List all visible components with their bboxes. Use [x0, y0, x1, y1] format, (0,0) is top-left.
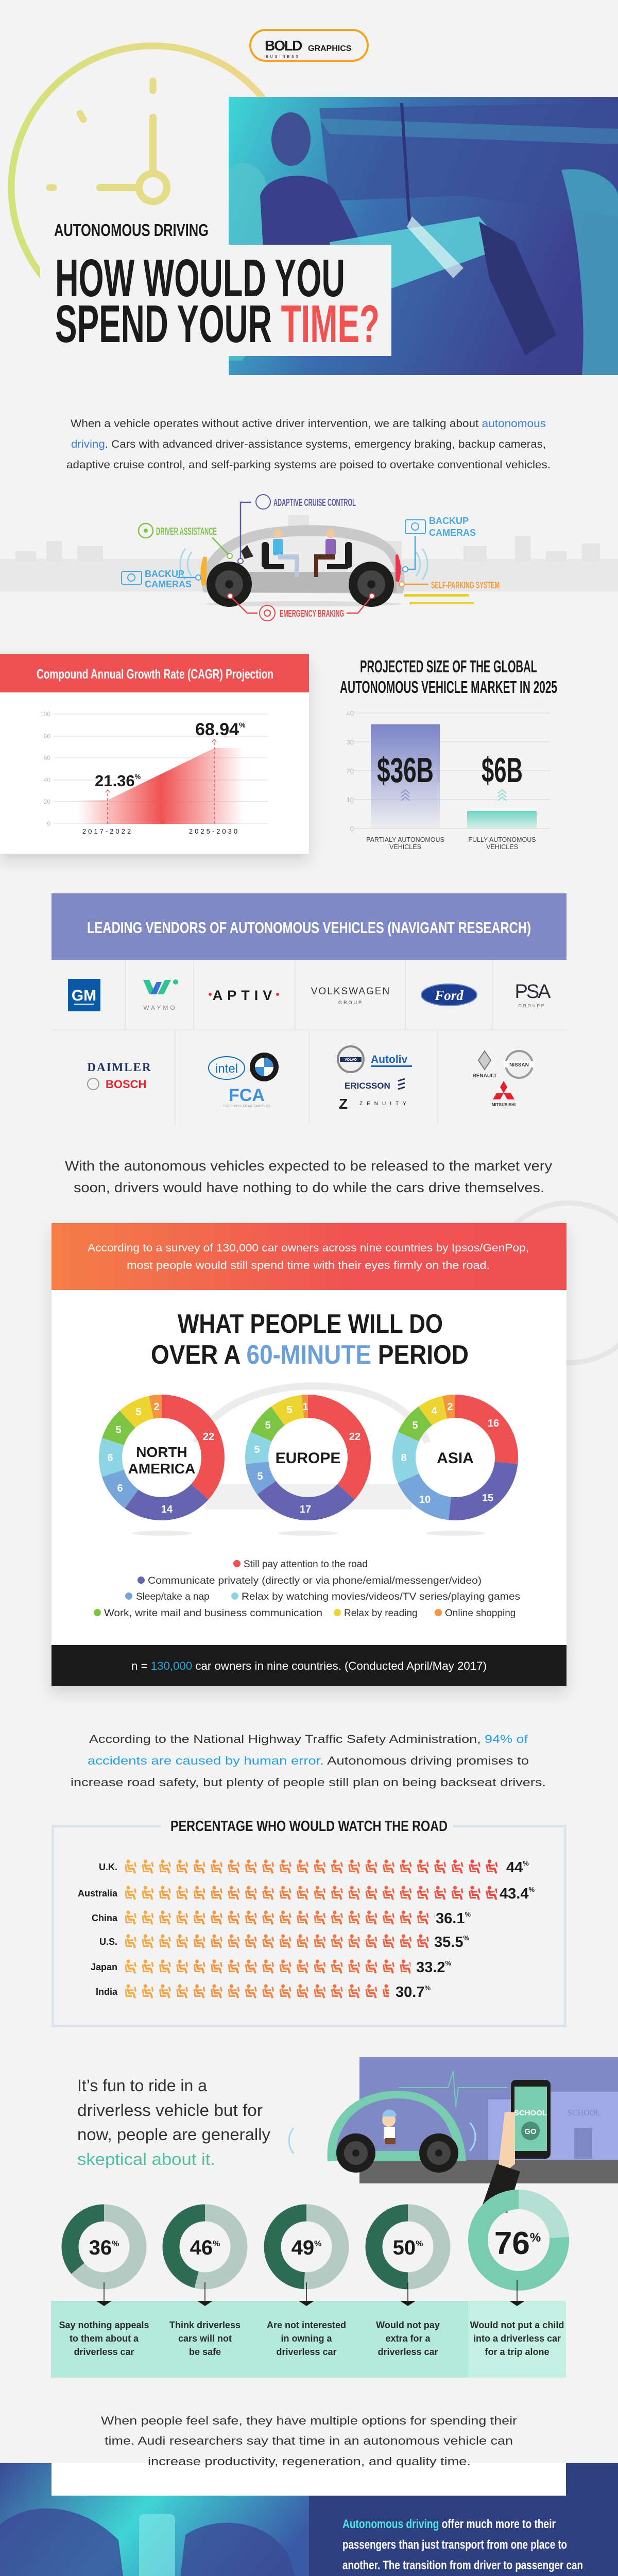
panel: skeptical captions: extra for a [385, 2333, 431, 2344]
CAGR header text: Compound Annual Growth Rate (CAGR) Projection [37, 666, 273, 682]
text: fun to ride but skeptical: It’s fun to ride in a [77, 2076, 207, 2095]
row: Australia: Australia [78, 1888, 118, 1899]
panel: CAGR projection chart: 2025-2030 [189, 827, 239, 835]
donut: North America [107, 1401, 214, 1515]
donut: Asia: 10 [419, 1494, 431, 1505]
panel: skeptical captions [51, 2301, 566, 2378]
donut: 50% would not pay extra: % [416, 2240, 423, 2248]
row: China: % [465, 1910, 471, 1918]
logo: Aptiv: APTIV [213, 988, 277, 1003]
subtitle: autonomous driving: AUTONOMOUS DRIVING [54, 221, 209, 240]
logo: Bold Business Graphics: GRAPHICS [308, 44, 352, 53]
donut: Europe: 17 [300, 1504, 311, 1515]
panel: CAGR projection chart: 68.94 [195, 720, 239, 739]
donut: Europe: 5 [286, 1404, 293, 1416]
logo: Intel / BMW / FCA [209, 1053, 279, 1108]
row: UK: % [523, 1859, 529, 1867]
logo: PSA Groupe: GROUPE [519, 1004, 545, 1008]
legend: Relax by watching movies/videos/TV series/playing games [242, 1591, 520, 1602]
chart: projected market size 2025: 20 [347, 767, 354, 775]
bar: fully autonomous [467, 811, 537, 828]
logo: Daimler / Bosch [87, 1061, 152, 1091]
icon: clock [11, 46, 295, 329]
donut: 76% would not put child: 76 [494, 2226, 530, 2261]
row: India: India [96, 1987, 118, 1997]
label: self-parking system: SELF-PARKING SYSTEM [431, 580, 500, 590]
logo: Volkswagen Group: GROUP [338, 1000, 363, 1005]
donut: North America: 5 [115, 1425, 122, 1436]
chart: projected market size 2025: $6B [482, 751, 523, 790]
donut: North America: 2 [153, 1401, 160, 1413]
legend: Online shopping [445, 1608, 516, 1619]
illustration: kid in driverless car, phone: SCHOOL [514, 2109, 547, 2117]
donut: 46% think not safe: % [213, 2240, 220, 2248]
chart: projected market size 2025: FULLY AUTONOMOUS [468, 836, 536, 843]
row: Australia: % [528, 1886, 535, 1893]
panel: CAGR projection chart: 21.36 [95, 772, 135, 790]
row: US [100, 1934, 469, 1948]
donut: Asia: ASIA [437, 1450, 474, 1467]
bar: partially autonomous [371, 724, 440, 828]
row: UK: U.K. [99, 1862, 117, 1872]
chart: projected market size 2025: VEHICLES [486, 843, 518, 851]
donut: Europe: 5 [265, 1420, 271, 1431]
panel: skeptical captions: driverless car [276, 2347, 337, 2357]
donut: Asia: 8 [401, 1452, 407, 1464]
panel: skeptical captions: in owning a [281, 2333, 332, 2344]
donut: 49% not interested: 49 [291, 2236, 314, 2259]
panel: leading vendors header [52, 893, 566, 960]
text: vehicles released soon [65, 1158, 553, 1195]
panel: survey what people will do [52, 1223, 566, 1686]
row: India: 30.7 [396, 1984, 424, 2001]
logo: Bold Business Graphics: BUSINESS [266, 55, 300, 59]
main title: HOW WOULD YOU [55, 248, 345, 308]
survey footnote bar [52, 1645, 566, 1686]
text: when people feel safe: When people feel safe, they have multiple options for spending their [101, 2414, 517, 2427]
label: emergency braking [228, 594, 374, 621]
legend: Sleep/take a nap [136, 1591, 210, 1602]
logo: Volvo / Autoliv / Ericsson / Zenuity: Z [339, 1096, 348, 1112]
label: adaptive cruise control [238, 495, 356, 564]
legend: Communicate privately (directly or via phone/emial/messenger/video) [148, 1575, 482, 1586]
donut: Asia: 16 [488, 1418, 499, 1429]
row: Australia [78, 1886, 535, 1900]
text: fun to ride but skeptical: driverless vehicle but for [77, 2101, 263, 2120]
logo: Ford [421, 984, 477, 1006]
text: fun to ride but skeptical: skeptical about it. [77, 2150, 215, 2168]
panel: CAGR projection chart: 100 [40, 710, 50, 718]
logo: Renault / Nissan / Mitsubishi: RENAULT [472, 1073, 497, 1079]
label: backup cameras right: CAMERAS [429, 528, 476, 538]
text: when people feel safe: increase productivity, regeneration, and quality time. [148, 2455, 471, 2468]
donut: 49% not interested: % [314, 2240, 321, 2248]
panel: CAGR projection chart: % [239, 721, 246, 729]
panel: CAGR projection chart: 20 [44, 798, 50, 805]
text: NHTSA human error [71, 1733, 546, 1789]
donut: 50% would not pay extra [374, 2213, 442, 2303]
panel: percentage who would watch the road [53, 1816, 565, 2026]
panel: skeptical captions: be safe [189, 2347, 221, 2357]
row: China: China [92, 1913, 118, 1923]
panel: percentage who would watch the road: PERCENTAGE WHO WOULD WATCH THE ROAD [170, 1818, 448, 1835]
text: NHTSA human error: increase road safety, but plenty of people still plan on being backseat drivers. [71, 1776, 546, 1789]
chart: projected market size 2025: 40 [347, 709, 354, 717]
donut: Europe: 5 [257, 1471, 263, 1482]
donut: Asia: 15 [482, 1493, 493, 1504]
panel: skeptical captions: Think driverless [169, 2320, 241, 2330]
donut: North America: NORTH [136, 1444, 187, 1460]
panel: CAGR projection chart: 0 [47, 820, 50, 827]
donut: Europe [254, 1401, 360, 1515]
panel: CAGR projection chart: 40 [44, 776, 50, 784]
chart: projected market size 2025: VEHICLES [389, 843, 421, 851]
panel: skeptical captions: Would not put a child [470, 2320, 564, 2330]
donut: Asia: 4 [431, 1405, 437, 1417]
panel: skeptical captions: for a trip alone [485, 2347, 550, 2357]
illustration: kid in driverless car, phone: GO [524, 2127, 537, 2136]
logo: GM [68, 979, 100, 1011]
donut: Europe: 5 [254, 1444, 260, 1455]
donut: 36% say nothing appeals [70, 2213, 138, 2303]
row: China: 36.1 [436, 1910, 465, 1927]
illustration: kid in driverless car, phone [289, 2057, 618, 2213]
donut: North America: AMERICA [128, 1461, 195, 1477]
label: backup cameras right: BACKUP [429, 516, 469, 526]
donut: 76% would not put child [478, 2199, 559, 2303]
chart: projected market size 2025: 30 [347, 738, 354, 746]
logo: Intel / BMW / FCA: FIAT CHRYSLER AUTOMOBILES [223, 1105, 270, 1108]
donut: 36% say nothing appeals: 36 [89, 2236, 112, 2259]
survey header [52, 1223, 566, 1290]
text: when people feel safe: time. Audi researchers say that time in an autonomous vehicle can [105, 2434, 513, 2447]
row: Japan [91, 1959, 451, 1973]
logo: Bold Business Graphics: BOLD [265, 38, 302, 54]
logo: Volvo / Autoliv / Ericsson / Zenuity: ERICSSON [345, 1081, 390, 1091]
label: backup cameras left: CAMERAS [145, 579, 192, 589]
logo: Volvo / Autoliv / Ericsson / Zenuity: Autoliv [371, 1054, 407, 1065]
car features illustration [0, 515, 618, 607]
logo: Renault / Nissan / Mitsubishi: MITSUBISHI [492, 1103, 516, 1107]
chart: projected market size 2025: $36B [377, 751, 434, 790]
text: NHTSA human error: According to the National Highway Traffic Safety Administration, 94% of [89, 1733, 528, 1745]
row: Japan: % [445, 1959, 451, 1967]
donut: North America: 22 [203, 1431, 214, 1443]
panel: CAGR projection chart: % [135, 773, 141, 781]
row: US: 35.5 [434, 1934, 463, 1951]
row: Japan: Japan [91, 1962, 117, 1972]
panel: CAGR projection chart: 2017-2022 [82, 827, 133, 835]
row: US: % [463, 1934, 469, 1942]
text: fun to ride but skeptical [77, 2076, 270, 2168]
logo: Volvo / Autoliv / Ericsson / Zenuity: VOLVO [345, 1058, 357, 1062]
donut: North America: 5 [135, 1406, 142, 1418]
logo: Intel / BMW / FCA: FCA [229, 1086, 265, 1105]
vendor logo grid [52, 960, 566, 1126]
text: when people feel safe [52, 2414, 566, 2496]
donut: Europe: EUROPE [276, 1450, 340, 1467]
panel: survey what people will do: OVER A 60-MINUTE PERIOD [151, 1340, 469, 1370]
panel: skeptical captions: cars will not [178, 2333, 232, 2344]
logo: PSA Groupe: PSA [514, 981, 551, 1003]
text: NHTSA human error: accidents are caused by human error. Autonomous driving promises to [88, 1754, 529, 1767]
donut: North America: 14 [161, 1504, 173, 1515]
legend: Still pay attention to the road [244, 1559, 368, 1570]
panel: CAGR projection chart: 60 [44, 754, 50, 761]
label: self-parking system [399, 580, 500, 590]
text: fun to ride but skeptical: now, people are generally [77, 2125, 270, 2144]
logo: Renault / Nissan / Mitsubishi [472, 1051, 535, 1107]
survey title: WHAT PEOPLE WILL DO [178, 1309, 443, 1339]
row: Japan: 33.2 [416, 1959, 445, 1976]
donut: Asia: 5 [412, 1420, 418, 1431]
legend: Work, write mail and business communication [104, 1608, 322, 1619]
donut: North America: 6 [117, 1483, 123, 1494]
text: vehicles released soon: soon, drivers would have nothing to do while the cars drive themselves. [74, 1180, 544, 1195]
row: UK [99, 1859, 528, 1873]
panel: skeptical captions: Say nothing appeals [59, 2320, 149, 2330]
logo: Waymo: WAYMO [143, 1004, 177, 1011]
panel: skeptical captions: to them about a [70, 2333, 139, 2344]
logo: Ford: Ford [434, 988, 464, 1003]
donut: Asia [401, 1401, 507, 1509]
intro paragraph [66, 418, 551, 471]
donut: 49% not interested [272, 2213, 340, 2303]
main title: SPEND YOUR TIME? [55, 294, 380, 353]
donut: Europe: 1 [302, 1401, 308, 1413]
logo: Waymo [143, 979, 178, 1011]
panel: skeptical captions: into a driverless car [473, 2333, 561, 2344]
logo: Intel / BMW / FCA: intel [215, 1062, 238, 1076]
row: China [92, 1910, 471, 1925]
text: vehicles released soon: With the autonomous vehicles expected to be released to the market very [65, 1158, 553, 1174]
logo: Daimler / Bosch: DAIMLER [87, 1061, 152, 1074]
donut: 50% would not pay extra: 50 [393, 2236, 416, 2259]
logo: Volvo / Autoliv / Ericsson / Zenuity [338, 1046, 412, 1112]
logo: Renault / Nissan / Mitsubishi: NISSAN [509, 1062, 529, 1068]
logo: GM: GM [72, 987, 96, 1004]
logo: Volvo / Autoliv / Ericsson / Zenuity: ZENUITY [359, 1101, 410, 1107]
panel: skeptical captions: Are not interested [267, 2320, 346, 2330]
label: backup cameras left: BACKUP [145, 569, 184, 579]
logo: Daimler / Bosch: BOSCH [106, 1078, 146, 1091]
donut: Europe: 22 [349, 1431, 360, 1443]
title box [40, 221, 391, 356]
label: backup cameras right [403, 516, 476, 572]
label: adaptive cruise control: ADAPTIVE CRUISE CONTROL [273, 497, 356, 509]
donut: 46% think not safe [171, 2213, 239, 2303]
row: UK: 44 [506, 1859, 523, 1876]
label: driver assistance [139, 523, 232, 558]
chart: projected market size 2025 [340, 657, 557, 851]
panel: CAGR projection chart [0, 654, 309, 854]
illustration: kid in driverless car, phone: SCHOOL [568, 2109, 600, 2117]
intro paragraph: driving. Cars with advanced driver-assistance systems, emergency braking, backup cameras, [71, 438, 546, 450]
main title [55, 248, 380, 353]
survey footnote bar: n = 130,000 car owners in nine countries. (Conducted April/May 2017) [131, 1659, 487, 1672]
logo: Volkswagen Group [311, 986, 390, 1005]
panel: skeptical captions: driverless car [377, 2347, 438, 2357]
label: driver assistance: DRIVER ASSISTANCE [156, 526, 217, 537]
donut: 36% say nothing appeals: % [112, 2240, 119, 2248]
legend [94, 1559, 520, 1619]
row: Australia: 43.4 [500, 1886, 528, 1902]
row: India: % [424, 1984, 431, 1992]
donut: 46% think not safe: 46 [190, 2236, 213, 2259]
panel: skeptical captions: Would not pay [376, 2320, 440, 2330]
panel: survey what people will do: According to a survey of 130,000 car owners across nine countries by Ipsos/GenPop, [88, 1242, 529, 1254]
row: India [96, 1984, 431, 1998]
chart: projected market size 2025: 0 [350, 825, 354, 833]
panel: CAGR projection chart: 80 [44, 733, 50, 740]
intro paragraph: adaptive cruise control, and self-parking systems are poised to overtake conventional vehicles. [66, 459, 551, 471]
chart: projected market size 2025: PARTIALY AUTONOMOUS [366, 836, 444, 843]
logo: Volkswagen Group: VOLKSWAGEN [311, 986, 390, 997]
panel: skeptical captions: driverless car [74, 2347, 134, 2357]
donut: Asia: 2 [447, 1401, 453, 1413]
label: emergency braking: EMERGENCY BRAKING [280, 608, 344, 619]
panel: survey what people will do: most people would still spend time with their eyes firmly on the road. [127, 1260, 490, 1272]
donut: 76% would not put child: % [530, 2231, 541, 2245]
band: photo and navy socialize text: Autonomous driving offer much more to their [342, 2517, 556, 2531]
logo: Bold Business Graphics [250, 30, 368, 61]
donut: North America: 6 [107, 1452, 113, 1464]
legend: Relax by reading [344, 1608, 418, 1619]
label: backup cameras left [122, 569, 201, 589]
intro paragraph: When a vehicle operates without active driver intervention, we are talking about autonomous [71, 418, 546, 430]
photo: man reading in autonomous car [229, 97, 618, 375]
row: US: U.S. [99, 1937, 117, 1947]
chart: projected market size 2025: 10 [347, 796, 354, 804]
band: photo and navy socialize text [0, 2463, 618, 2576]
